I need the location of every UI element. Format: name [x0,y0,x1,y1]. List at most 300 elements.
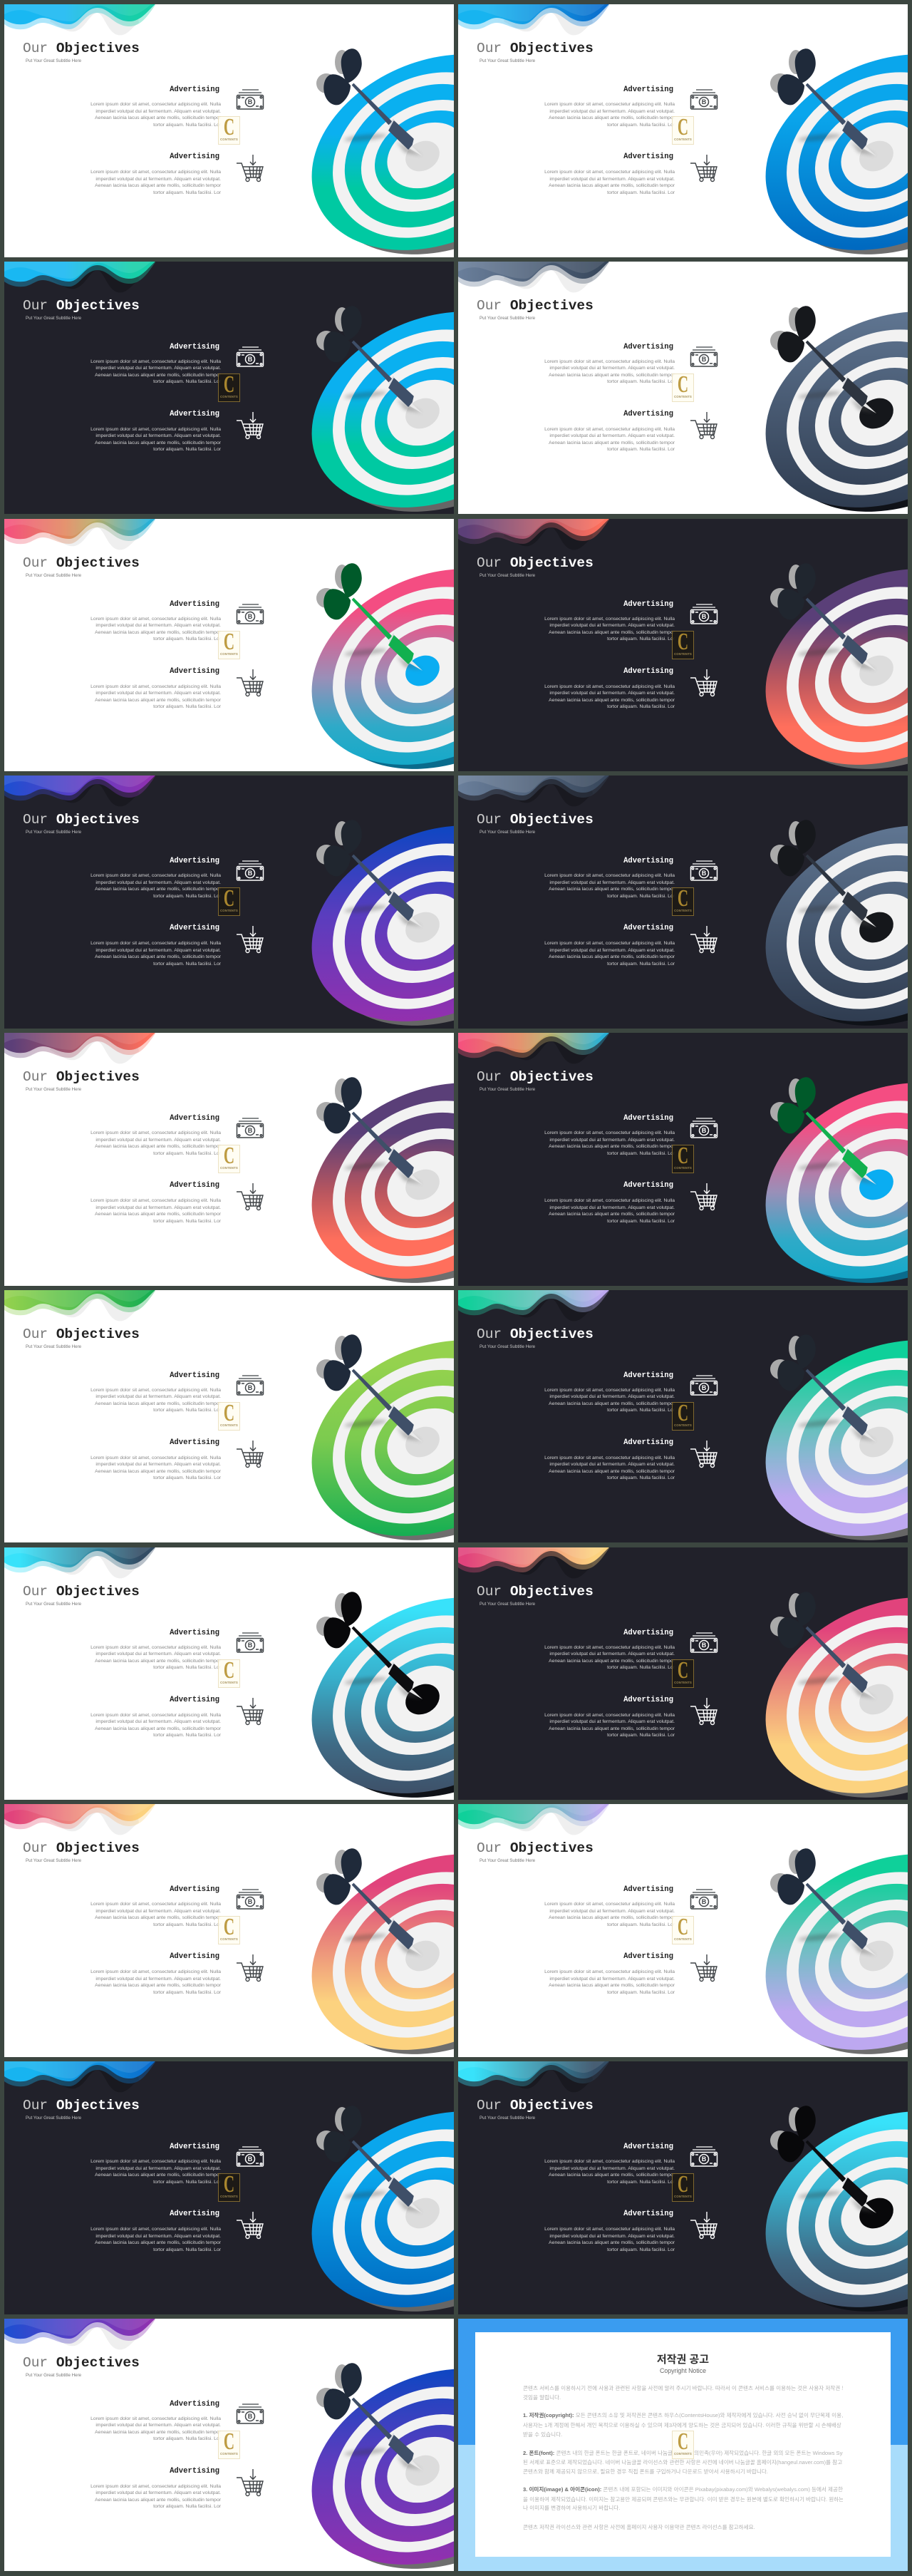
text block: Lorem ipsum dolor sit amet, consectetur adipiscing elit. Nulla [90,359,221,364]
wave header [458,776,609,807]
text block [544,2158,675,2185]
wave header [4,1804,155,1835]
wave header [4,1290,155,1321]
slide 4: light, slate [458,262,908,514]
title: Our Objectives [23,2098,140,2113]
text block: Aenean lacinia lacus aliquet ante mollis, sollicitudin tempor [549,954,675,959]
wave header [458,1547,609,1578]
watermark badge: CONTENTS [220,651,238,656]
watermark badge: CONTENTS [674,2195,692,2198]
text block [90,2158,221,2185]
subtitle: Put Your Great Subtitle Here [480,58,535,63]
text block [544,941,675,967]
text block: imperdiet volutpat dui at fermentum. Aliquam erat volutpat. [95,2166,221,2171]
copyright clause line 3: 받을 수 있습니다. [523,2431,562,2438]
title: Our Objectives [23,555,140,570]
subtitle: Put Your Great Subtitle Here [480,1601,535,1607]
watermark badge [672,2431,694,2459]
text block [544,1712,675,1739]
artwork: wave, dartboard, dart, icons [458,519,908,769]
text block: Lorem ipsum dolor sit amet, consectetur adipiscing elit. Nulla [544,684,675,689]
dartboard [766,569,912,768]
text block: Lorem ipsum dolor sit amet, consectetur adipiscing elit. Nulla [90,2416,221,2421]
text block: imperdiet volutpat dui at fermentum. Aliquam erat volutpat. [95,177,221,182]
text block: Lorem ipsum dolor sit amet, consectetur adipiscing elit. Nulla [90,873,221,878]
text block: Aenean lacinia lacus aliquet ante mollis, sollicitudin tempor [549,2240,675,2245]
slide 9: light, purple to coral [4,1033,454,1286]
text block: tortor aliquam. Nulla facilisi. Lor [607,1151,675,1156]
heading: Advertising [170,2400,219,2408]
text block: tortor aliquam. Nulla facilisi. Lor [607,1475,675,1480]
dart [316,306,423,413]
slide 14: dark, pink to sand [458,1547,908,1800]
wave header [4,2319,155,2349]
title: Our Objectives [23,1326,140,1342]
icon: cart [237,926,263,953]
text block [544,617,675,642]
title: Our Objectives [23,298,140,314]
title: Our Objectives [477,1326,594,1342]
watermark badge: CONTENTS [220,138,238,141]
icon: money [237,1118,264,1138]
dartboard [766,1083,912,1283]
text block: Lorem ipsum dolor sit amet, consectetur adipiscing elit. Nulla [544,1388,675,1393]
text block: tortor aliquam. Nulla facilisi. Lor [153,379,221,384]
text block: imperdiet volutpat dui at fermentum. Aliquam erat volutpat. [95,2423,221,2428]
text block: Aenean lacinia lacus aliquet ante mollis, sollicitudin tempor [95,183,221,188]
watermark badge [672,1402,694,1431]
icon: cart [237,669,263,696]
dartboard [312,825,567,1026]
title: Our Objectives [23,2355,140,2371]
text block: imperdiet volutpat dui at fermentum. Aliquam erat volutpat. [95,2234,221,2239]
text block: tortor aliquam. Nulla facilisi. Lor [607,1219,675,1224]
dart [770,306,876,413]
artwork: wave, dartboard, dart, icons [458,2061,908,2314]
watermark badge [672,373,694,402]
text block: Lorem ipsum dolor sit amet, consectetur adipiscing elit. Nulla [544,1713,675,1718]
text block: Aenean lacinia lacus aliquet ante mollis, sollicitudin tempor [95,630,221,635]
text block: imperdiet volutpat dui at fermentum. Aliquam erat volutpat. [549,1909,675,1914]
watermark badge: CONTENTS [674,651,692,656]
text block: imperdiet volutpat dui at fermentum. Aliquam erat volutpat. [95,433,221,438]
watermark badge [218,1402,240,1431]
slide 15: light, pink to sand [4,1804,454,2057]
subtitle: Put Your Great Subtitle Here [480,573,535,577]
text block: tortor aliquam. Nulla facilisi. Lor [153,1733,221,1738]
heading: Advertising [170,1371,219,1380]
text block: Aenean lacinia lacus aliquet ante mollis, sollicitudin tempor [95,1401,221,1406]
watermark badge [218,887,240,916]
watermark badge [218,1145,240,1173]
text block: Lorem ipsum dolor sit amet, consectetur adipiscing elit. Nulla [90,1198,221,1203]
heading: Advertising [170,667,219,676]
text block: Lorem ipsum dolor sit amet, consectetur adipiscing elit. Nulla [544,1130,675,1135]
text block [90,427,221,452]
text block: tortor aliquam. Nulla facilisi. Lor [153,704,221,709]
artwork: wave, dartboard, dart, icons [458,4,908,254]
wave header [4,1033,155,1063]
text block: Aenean lacinia lacus aliquet ante mollis, sollicitudin tempor [95,1915,221,1920]
text block: imperdiet volutpat dui at fermentum. Aliquam erat volutpat. [549,1138,675,1143]
title: Our Objectives [23,1584,140,1599]
text block [544,2226,675,2253]
slide 11: light, green [4,1290,454,1542]
text block: Lorem ipsum dolor sit amet, consectetur adipiscing elit. Nulla [544,1198,675,1203]
text block: Aenean lacinia lacus aliquet ante mollis, sollicitudin tempor [95,1726,221,1731]
subtitle: Put Your Great Subtitle Here [26,316,81,321]
notice subtitle: Copyright Notice [660,2367,706,2374]
icon: money [691,347,717,366]
heading: Advertising [623,924,673,932]
dartboard [312,2111,567,2312]
notice white panel [475,2332,891,2557]
text block: Lorem ipsum dolor sit amet, consectetur adipiscing elit. Nulla [90,2227,221,2232]
dartboard [312,2369,567,2569]
text block: imperdiet volutpat dui at fermentum. Aliquam erat volutpat. [549,948,675,953]
heading: Advertising [623,1952,673,1961]
dart [316,1077,423,1185]
subtitle: Put Your Great Subtitle Here [26,58,81,63]
text block [90,1969,221,1996]
wave header [4,4,155,35]
heading: Advertising [623,86,673,94]
text block: Lorem ipsum dolor sit amet, consectetur adipiscing elit. Nulla [544,1645,675,1650]
text block: tortor aliquam. Nulla facilisi. Lor [607,704,675,709]
title: Our Objectives [23,41,140,56]
slide 1: light, blue to teal [4,4,454,257]
text block: imperdiet volutpat dui at fermentum. Aliquam erat volutpat. [549,1977,675,1982]
wave header [458,519,609,550]
text block: Lorem ipsum dolor sit amet, consectetur adipiscing elit. Nulla [544,102,675,107]
icon: cart [237,2469,263,2495]
text block [90,1198,221,1224]
text block: Aenean lacinia lacus aliquet ante mollis, sollicitudin tempor [95,2173,221,2178]
text block [90,1387,221,1414]
watermark badge: CONTENTS [220,2195,238,2198]
title: Our Objectives [477,1840,594,1856]
text block: tortor aliquam. Nulla facilisi. Lor [607,123,675,128]
text block: tortor aliquam. Nulla facilisi. Lor [607,447,675,452]
icon: cart [690,2212,717,2238]
heading: Advertising [170,153,219,161]
watermark badge [672,630,694,659]
slide 2: light, blue [458,4,908,257]
text block: imperdiet volutpat dui at fermentum. Aliquam erat volutpat. [549,433,675,438]
icon: money [237,347,264,366]
slide 13: light, cyan to navy with black dart [4,1547,454,1800]
artwork: wave, dartboard, dart, icons [458,262,908,512]
text block [90,1644,221,1671]
dart [770,820,876,927]
title: Our Objectives [477,2098,594,2113]
wave header [458,1290,609,1321]
text block: Lorem ipsum dolor sit amet, consectetur adipiscing elit. Nulla [90,2484,221,2489]
text block: tortor aliquam. Nulla facilisi. Lor [153,1408,221,1413]
icon: money [691,90,717,109]
icon: cart [690,1698,717,1724]
artwork: wave, dartboard, dart, icons [4,776,454,1026]
text block: Aenean lacinia lacus aliquet ante mollis, sollicitudin tempor [95,1212,221,1217]
watermark badge: CONTENTS [220,909,238,912]
watermark badge [218,2431,240,2459]
heading: Advertising [170,1114,219,1123]
heading: Advertising [170,410,219,418]
dartboard [766,1597,912,1797]
dart [316,48,423,156]
subtitle: Put Your Great Subtitle Here [26,830,81,835]
text block [544,873,675,899]
icon: money [237,90,264,109]
text block: Lorem ipsum dolor sit amet, consectetur adipiscing elit. Nulla [90,170,221,175]
artwork: wave, dartboard, dart, icons [4,519,454,769]
text block: Aenean lacinia lacus aliquet ante mollis, sollicitudin tempor [95,2498,221,2503]
dart [316,2106,423,2213]
watermark badge: CONTENTS [220,1423,238,1427]
text block: Lorem ipsum dolor sit amet, consectetur adipiscing elit. Nulla [90,1713,221,1718]
dart [770,1592,876,1699]
text block: tortor aliquam. Nulla facilisi. Lor [607,1665,675,1670]
icon: money [691,1118,717,1138]
artwork: wave, dartboard, dart, icons [458,776,908,1026]
watermark badge: CONTENTS [674,2452,692,2456]
text block: tortor aliquam. Nulla facilisi. Lor [153,447,221,452]
text block: Lorem ipsum dolor sit amet, consectetur adipiscing elit. Nulla [544,427,675,432]
watermark badge [672,1916,694,1944]
text block [544,1969,675,1996]
text block: Lorem ipsum dolor sit amet, consectetur adipiscing elit. Nulla [90,1902,221,1907]
icon: cart [690,1954,717,1982]
dartboard [312,1854,567,2054]
text block: Lorem ipsum dolor sit amet, consectetur adipiscing elit. Nulla [544,1902,675,1907]
slide 3: dark, blue to teal [4,262,454,514]
watermark badge: CONTENTS [674,1166,692,1170]
text block: tortor aliquam. Nulla facilisi. Lor [153,1219,221,1224]
dart [770,2106,876,2213]
subtitle: Put Your Great Subtitle Here [480,2116,535,2121]
text block: Aenean lacinia lacus aliquet ante mollis, sollicitudin tempor [549,2173,675,2178]
text block [544,1901,675,1928]
watermark badge: CONTENTS [220,395,238,398]
title: Our Objectives [23,1840,140,1856]
icon: cart [690,1183,717,1210]
text block: Lorem ipsum dolor sit amet, consectetur adipiscing elit. Nulla [544,170,675,175]
artwork: wave, dartboard, dart, icons [4,262,454,512]
icon: cart [237,1183,263,1210]
wave header [458,1033,609,1063]
heading: Advertising [170,1952,219,1961]
text block: imperdiet volutpat dui at fermentum. Aliquam erat volutpat. [95,691,221,696]
text block: imperdiet volutpat dui at fermentum. Aliquam erat volutpat. [549,366,675,371]
watermark badge [218,1659,240,1688]
dart [770,1848,876,1956]
wave header [458,262,609,292]
icon: cart [690,155,717,181]
icon: cart [237,1954,263,1982]
heading: Advertising [623,1885,673,1894]
dartboard [312,1083,567,1283]
heading: Advertising [170,1695,219,1704]
text block: imperdiet volutpat dui at fermentum. Aliquam erat volutpat. [95,1138,221,1143]
watermark badge [218,2173,240,2202]
text block: Lorem ipsum dolor sit amet, consectetur adipiscing elit. Nulla [544,359,675,364]
subtitle: Put Your Great Subtitle Here [26,2116,81,2121]
dartboard [766,2111,912,2312]
wave header [4,2061,155,2092]
watermark badge: CONTENTS [220,1937,238,1941]
heading: Advertising [623,1371,673,1380]
text block: imperdiet volutpat dui at fermentum. Aliquam erat volutpat. [549,691,675,696]
subtitle: Put Your Great Subtitle Here [26,573,81,577]
text block [90,1130,221,1156]
text block [544,1644,675,1671]
dartboard [766,311,912,512]
dartboard [766,1854,912,2054]
text block: Lorem ipsum dolor sit amet, consectetur adipiscing elit. Nulla [90,1969,221,1974]
text block: tortor aliquam. Nulla facilisi. Lor [153,2504,221,2509]
dartboard [766,825,912,1026]
dart [316,1592,423,1699]
text block: tortor aliquam. Nulla facilisi. Lor [153,637,221,642]
text block: Lorem ipsum dolor sit amet, consectetur adipiscing elit. Nulla [544,1456,675,1460]
heading: Advertising [170,1438,219,1447]
text block: imperdiet volutpat dui at fermentum. Aliquam erat volutpat. [95,2490,221,2495]
watermark badge [672,1145,694,1173]
text block: Lorem ipsum dolor sit amet, consectetur adipiscing elit. Nulla [544,2159,675,2164]
text block: tortor aliquam. Nulla facilisi. Lor [607,379,675,384]
watermark badge [218,1916,240,1944]
text block: Aenean lacinia lacus aliquet ante mollis, sollicitudin tempor [549,1983,675,1988]
text block: imperdiet volutpat dui at fermentum. Aliquam erat volutpat. [95,1977,221,1982]
text block: Aenean lacinia lacus aliquet ante mollis, sollicitudin tempor [549,1915,675,1920]
watermark badge [672,1659,694,1688]
icon: money [691,1376,717,1395]
text block: Aenean lacinia lacus aliquet ante mollis, sollicitudin tempor [549,183,675,188]
slide 6: dark, purple to coral [458,519,908,771]
text block: imperdiet volutpat dui at fermentum. Aliquam erat volutpat. [549,177,675,182]
icon: money [691,604,717,623]
text block: tortor aliquam. Nulla facilisi. Lor [607,1733,675,1738]
text block [544,170,675,195]
text block: Aenean lacinia lacus aliquet ante mollis, sollicitudin tempor [549,1212,675,1217]
heading: Advertising [170,2210,219,2218]
title: Our Objectives [477,298,594,314]
text block: Aenean lacinia lacus aliquet ante mollis, sollicitudin tempor [95,441,221,445]
text block: Aenean lacinia lacus aliquet ante mollis, sollicitudin tempor [95,1469,221,1474]
icon: cart [690,1441,717,1467]
text block: tortor aliquam. Nulla facilisi. Lor [153,962,221,967]
text block [90,2483,221,2510]
text block [544,359,675,384]
icon: cart [237,1698,263,1724]
text block [90,941,221,967]
text block: tortor aliquam. Nulla facilisi. Lor [607,894,675,899]
dart [770,1334,876,1442]
artwork: wave, dartboard, dart, icons [458,1547,908,1800]
dartboard [312,54,567,254]
heading: Advertising [623,857,673,865]
text block: tortor aliquam. Nulla facilisi. Lor [607,2180,675,2185]
dart [316,1848,423,1956]
text block: tortor aliquam. Nulla facilisi. Lor [153,2180,221,2185]
heading: Advertising [623,1438,673,1447]
text block: tortor aliquam. Nulla facilisi. Lor [607,1922,675,1927]
heading: Advertising [623,1114,673,1123]
dart [770,48,876,156]
heading: Advertising [623,343,673,351]
text block [90,873,221,899]
wave header [4,776,155,807]
subtitle: Put Your Great Subtitle Here [26,1601,81,1607]
text block: Lorem ipsum dolor sit amet, consectetur adipiscing elit. Nulla [90,684,221,689]
text block: Aenean lacinia lacus aliquet ante mollis, sollicitudin tempor [95,698,221,703]
subtitle: Put Your Great Subtitle Here [480,1344,535,1349]
text block: Aenean lacinia lacus aliquet ante mollis, sollicitudin tempor [549,1401,675,1406]
text block [90,2416,221,2443]
text block: Aenean lacinia lacus aliquet ante mollis, sollicitudin tempor [549,115,675,120]
text block: Lorem ipsum dolor sit amet, consectetur adipiscing elit. Nulla [90,1388,221,1393]
text block: Aenean lacinia lacus aliquet ante mollis, sollicitudin tempor [549,1469,675,1474]
subtitle: Put Your Great Subtitle Here [26,1344,81,1349]
heading: Advertising [623,600,673,609]
slide 16: light, teal to lilac [458,1804,908,2057]
text block: imperdiet volutpat dui at fermentum. Aliquam erat volutpat. [95,109,221,114]
dartboard [766,1340,912,1540]
text block: Aenean lacinia lacus aliquet ante mollis, sollicitudin tempor [549,1726,675,1731]
watermark badge: CONTENTS [674,395,692,398]
artwork: wave, dartboard, dart, icons [4,4,454,254]
text block [544,1455,675,1482]
text block: imperdiet volutpat dui at fermentum. Aliquam erat volutpat. [95,1205,221,1210]
text block: tortor aliquam. Nulla facilisi. Lor [153,2247,221,2252]
watermark badge: CONTENTS [674,1423,692,1427]
title: Our Objectives [477,555,594,570]
heading: Advertising [170,86,219,94]
text block: Aenean lacinia lacus aliquet ante mollis, sollicitudin tempor [95,2430,221,2435]
text block: Lorem ipsum dolor sit amet, consectetur adipiscing elit. Nulla [90,1130,221,1135]
heading: Advertising [623,1181,673,1190]
icon: money [691,861,717,880]
icon: cart [237,1441,263,1467]
icon: money [691,1890,717,1909]
dart [316,563,423,670]
heading: Advertising [170,2143,219,2151]
icon: cart [690,926,717,953]
icon: money [237,861,264,880]
title: Our Objectives [23,812,140,828]
text block: Lorem ipsum dolor sit amet, consectetur adipiscing elit. Nulla [90,941,221,946]
dartboard [312,1597,567,1797]
heading: Advertising [170,1628,219,1637]
text block: tortor aliquam. Nulla facilisi. Lor [153,1151,221,1156]
watermark badge: CONTENTS [674,138,692,141]
text block: imperdiet volutpat dui at fermentum. Aliquam erat volutpat. [549,1652,675,1657]
slide 5: light, pink to teal with green dart [4,519,454,771]
text block: tortor aliquam. Nulla facilisi. Lor [153,1922,221,1927]
dart [316,1334,423,1442]
text block [544,1130,675,1156]
slide 8: dark, slate [458,776,908,1029]
dart [316,820,423,927]
dartboard [312,1340,567,1540]
heading: Advertising [623,2210,673,2218]
text block: Aenean lacinia lacus aliquet ante mollis, sollicitudin tempor [95,373,221,378]
text block: Aenean lacinia lacus aliquet ante mollis, sollicitudin tempor [95,115,221,120]
text block [90,170,221,195]
text block [90,2226,221,2253]
text block: tortor aliquam. Nulla facilisi. Lor [153,190,221,195]
text block: imperdiet volutpat dui at fermentum. Aliquam erat volutpat. [549,623,675,628]
